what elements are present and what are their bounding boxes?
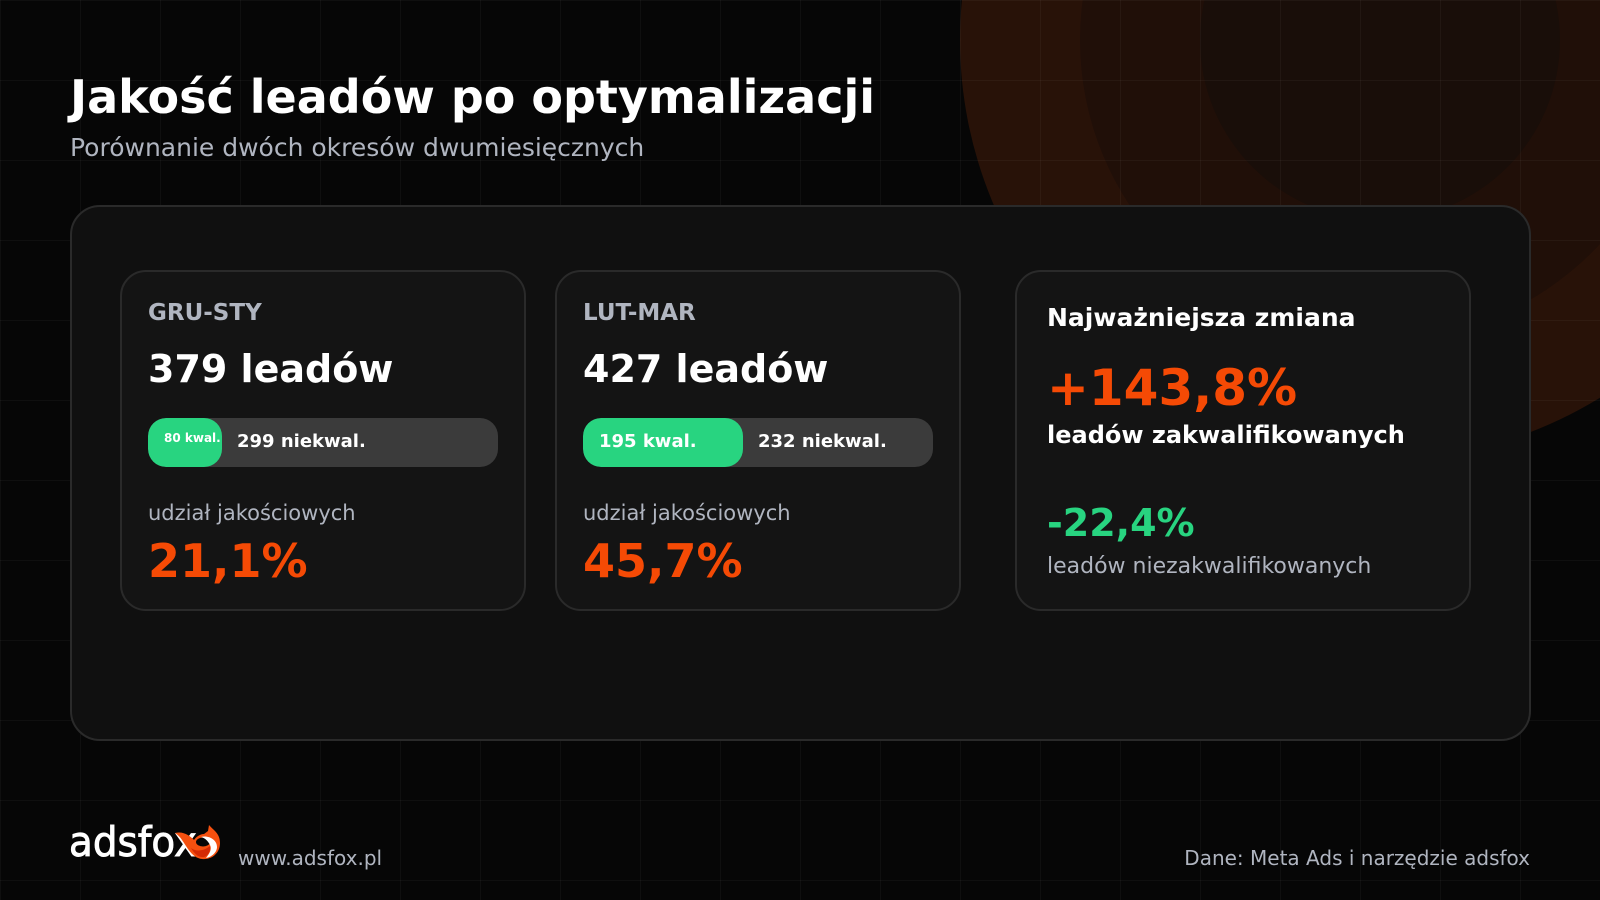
- period label: GRU-STY: [148, 300, 262, 326]
- subtitle: Porównanie dwóch okresów dwumiesięcznych: [70, 133, 644, 162]
- panel: LUT-MAR: [555, 270, 961, 611]
- unqualified label: 232 niekwal.: [758, 431, 887, 452]
- qualified segment: 195 kwal.: [599, 431, 697, 452]
- data source: Dane: Meta Ads i narzędzie adsfox: [1184, 846, 1530, 870]
- share label: udział jakościowych: [583, 501, 791, 525]
- total leads: 379 leadów: [148, 347, 393, 391]
- total leads: 427 leadów: [583, 347, 828, 391]
- share label: udział jakościowych: [148, 501, 356, 525]
- unqualified change label: leadów niezakwalifikowanych: [1047, 554, 1371, 579]
- share value: 21,1%: [148, 534, 308, 588]
- website: www.adsfox.pl: [238, 846, 382, 870]
- qualified segment: 80 kwal.: [164, 431, 221, 445]
- stacked bar: [148, 418, 498, 467]
- qualified change value: +143,8%: [1047, 359, 1297, 417]
- qualified change label: leadów zakwalifikowanych: [1047, 421, 1405, 449]
- panel: main container: [70, 205, 1531, 741]
- unqualified change value: -22,4%: [1047, 501, 1195, 545]
- qualified segment: [148, 418, 222, 467]
- stacked bar: [583, 418, 933, 467]
- unqualified label: 299 niekwal.: [237, 431, 366, 452]
- panel: key change: [1015, 270, 1471, 611]
- period label: LUT-MAR: [583, 300, 696, 326]
- heading: Najważniejsza zmiana: [1047, 303, 1355, 332]
- qualified segment: [583, 418, 743, 467]
- share value: 45,7%: [583, 534, 743, 588]
- title: Jakość leadów po optymalizacji: [70, 70, 875, 124]
- panel: GRU-STY: [120, 270, 526, 611]
- logo: adsfox: adsfox: [69, 818, 197, 866]
